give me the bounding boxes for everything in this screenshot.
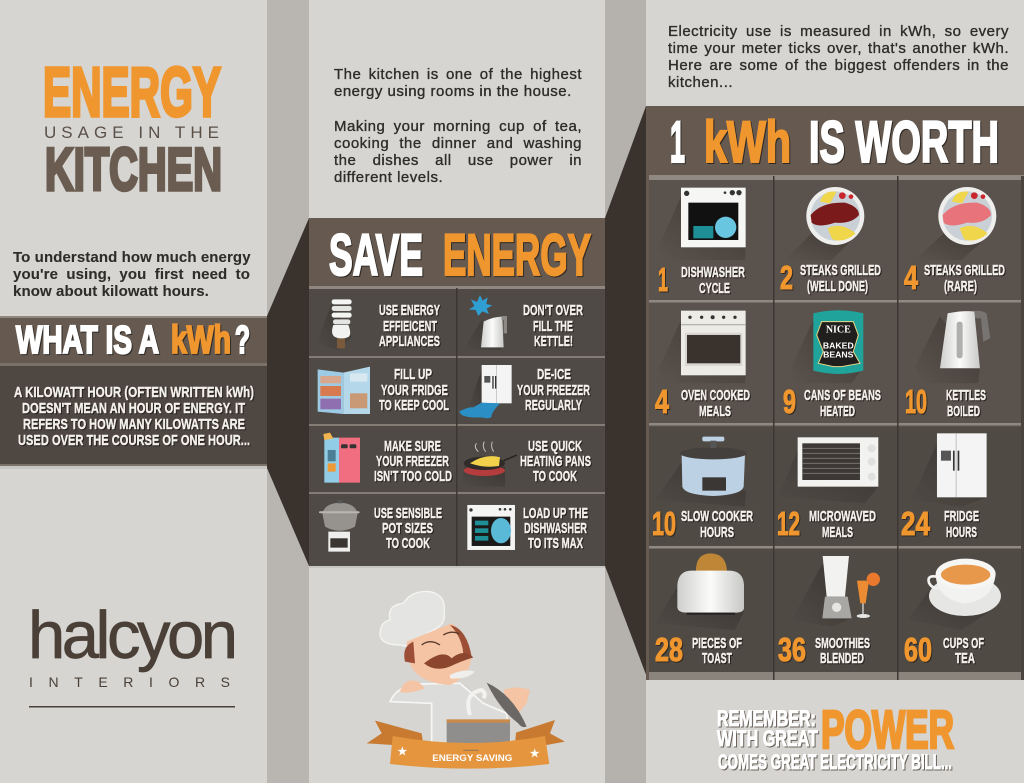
text: load up dishwasher: LOAD UP THE [523,505,588,522]
spoon [450,671,475,679]
fold: left [267,218,309,566]
logo: halcyon interiors: INTERIORS [29,674,230,690]
icon: baked beans: NICE [826,325,851,336]
text: quick heating pans: TO COOK [533,468,577,485]
cell: steaks well done: STEAKS GRILLED [800,262,881,279]
cell: oven cooked meals: MEALS [699,403,731,420]
text: don't over fill: FILL THE [533,318,573,335]
text: quick heating pans [520,438,591,485]
text: sensible pot sizes: TO COOK [386,535,430,552]
cell: fridge hours: HOURS [946,524,977,541]
heading: what is a kWh: WHAT IS A [16,319,159,362]
heading: what is a kWh: kWh [171,319,231,362]
text: don't over fill [523,302,583,350]
icon: toaster [655,553,744,630]
text: fill up fridge: TO KEEP COOL [379,397,449,414]
heading: 1 kWh is worth: 1 [670,110,685,175]
heading: save energy: SAVE [329,223,423,288]
right intro text: Here are some of the biggest offenders in the [668,57,1009,74]
cell: cups of tea: CUPS OF [943,635,984,652]
middle intro text: the dishes all use power in [334,152,582,169]
icon: fridge [912,433,987,507]
cell: fridge hours: FRIDGE [944,508,979,525]
cell: steaks well done: (WELL DONE) [807,278,868,295]
icon: cold freezer [323,433,360,483]
text: de-ice freezer: REGULARLY [525,397,582,414]
text block: kWh definition: A KILOWATT HOUR (OFTEN WRITTEN kWh) [14,384,254,401]
chef hand [400,680,530,713]
icon: steak rare [915,187,996,260]
icon: chef with pot and banner [367,591,565,769]
cell: cans of beans: 9 [783,383,796,420]
icon: bulb [317,299,352,350]
middle intro text: different levels. [334,169,443,186]
cell: dishwasher cycle [658,261,745,298]
heading: what is a kWh: ? [235,319,250,362]
cell: steaks rare: (RARE) [944,278,977,295]
cell: fridge hours [901,505,979,542]
text: de-ice freezer: YOUR FREEZER [517,382,590,399]
right intro text [668,23,1009,91]
icon: microwave [778,437,878,503]
title [43,53,222,203]
text: freezer not too cold [374,438,452,485]
cell: pieces of toast: PIECES OF [692,635,742,652]
text: quick heating pans: HEATING PANS [520,453,591,470]
panel: 1 kWh is worth [646,106,1024,680]
pot lid [487,683,527,727]
footer slogan: POWER [821,700,954,760]
middle intro text: energy using rooms in the house. [334,83,572,100]
middle intro text: The kitchen is one of the highest [334,66,582,83]
heading: 1 kWh is worth: kWh [704,110,791,175]
heading: save energy [329,223,591,288]
cell: slow cooker hours: HOURS [700,524,734,541]
middle intro text: Making your morning cup of tea, [334,118,582,135]
chef moustache [424,653,473,669]
middle intro text [334,66,582,186]
text: load up dishwasher [523,505,588,552]
cell: smoothies blended [778,631,870,668]
text: fill up fridge [379,366,449,414]
text: use energy efficient [379,302,440,350]
text: fill up fridge: YOUR FRIDGE [381,382,448,399]
cell: slow cooker hours [652,505,753,542]
banner: ★ [397,743,408,758]
cell: cans of beans [783,383,881,420]
cell: cans of beans: HEATED [820,403,855,420]
logo: halcyon interiors [28,598,238,708]
icon: steak well done [785,187,864,260]
icon: baked beans: BAKED [823,340,854,350]
cell: kettles boiled: 10 [905,383,927,420]
intro text: know about kilowatt hours. [13,283,209,300]
cell: smoothies blended: 36 [778,631,806,668]
text: freezer not too cold: ISN'T TOO COLD [374,468,452,485]
chef face [407,623,472,685]
pot [447,721,510,743]
heading: save energy: ENERGY [443,223,591,288]
chef hat [380,591,444,647]
cell: slow cooker hours: SLOW COOKER [681,508,753,525]
title: ENERGY [43,53,221,131]
panel: save energy [309,218,605,568]
text: freezer not too cold: MAKE SURE [384,438,441,455]
right intro text: time your meter ticks over, that's another kWh. [668,40,1009,57]
cell: microwaved meals: MEALS [822,524,853,541]
cell: microwaved meals: 12 [777,505,800,542]
icon: baked beans [792,310,863,383]
title: USAGE IN THE [44,123,219,142]
cell: cans of beans: CANS OF BEANS [804,387,881,404]
text: load up dishwasher: TO ITS MAX [528,535,583,552]
text block: kWh definition: REFERS TO HOW MANY KILOWATTS ARE [23,416,245,433]
cell: slow cooker hours: 10 [652,505,676,542]
steam [468,690,485,715]
icon: loaded dishwasher [467,505,515,550]
middle intro text: cooking the dinner and washing [334,135,582,152]
text: sensible pot sizes: POT SIZES [382,520,433,537]
text: freezer not too cold: YOUR FREEZER [376,453,449,470]
text: sensible pot sizes [374,505,442,552]
banner [367,720,565,769]
chef body [390,683,510,743]
banner: ENERGY SAVING [432,753,512,763]
icon: overfilled kettle [463,295,507,350]
cell: microwaved meals: MICROWAVED [809,508,876,525]
cell: dishwasher cycle: CYCLE [699,280,730,297]
text: de-ice freezer: DE-ICE [537,366,571,383]
cell: kettles boiled: KETTLES [946,387,986,404]
text: sensible pot sizes: USE SENSIBLE [374,505,442,522]
text: fill up fridge: FILL UP [394,366,432,383]
heading: 1 kWh is worth [670,110,999,175]
cell: pieces of toast: TOAST [702,650,732,667]
text: don't over fill: KETTLE! [534,333,573,350]
fold: right [605,106,648,680]
cell: dishwasher cycle: DISHWASHER [681,264,745,281]
icon: pot on stove [319,500,360,552]
title: KITCHEN [45,136,222,203]
cell: kettles boiled [905,383,986,420]
cell: smoothies blended: BLENDED [820,650,864,667]
intro text: you're using, you first need to [13,266,250,283]
icon: frying pan [462,442,517,487]
cell: smoothies blended: SMOOTHIES [815,635,870,652]
cell: cups of tea [904,631,984,668]
cell: fridge hours: 24 [901,505,931,542]
intro text: To understand how much energy [13,249,251,266]
text block: kWh definition: DOESN'T MEAN AN HOUR OF ENERGY. IT [22,400,245,417]
cell: dishwasher cycle: 1 [658,261,668,298]
right intro text: kitchen... [668,74,733,91]
icon: open fridge [318,367,370,414]
icon: melting freezer [459,365,512,418]
cell: steaks well done [780,259,881,296]
text: load up dishwasher: DISHWASHER [524,520,587,537]
cell: pieces of toast: 28 [655,631,683,668]
cell: steaks rare [904,259,1005,296]
cell: steaks rare: 4 [904,259,918,296]
cell: cups of tea: 60 [904,631,932,668]
text: quick heating pans: USE QUICK [528,438,582,455]
footer slogan: WITH GREAT [717,726,818,751]
cell: oven cooked meals [655,383,750,420]
icon: blender and smoothie [792,556,880,627]
text block: kWh definition [14,384,254,449]
icon: cup of tea [908,559,1001,630]
icon: kettle [915,311,990,383]
footer slogan [717,700,954,774]
text: use energy efficient: USE ENERGY [379,302,440,319]
text block: kWh definition: USED OVER THE COURSE OF ONE HOUR... [18,432,250,449]
cell: oven cooked meals: 4 [655,383,669,420]
banner: ★ [529,745,540,760]
logo: halcyon interiors: halcyon [28,598,238,673]
footer slogan: REMEMBER: [717,706,816,731]
text: don't over fill: DON'T OVER [523,302,583,319]
cell: cups of tea: TEA [955,650,975,667]
icon: baked beans: BEANS [823,349,854,359]
icon: dishwasher [658,188,746,260]
cell: steaks well done: 2 [780,259,793,296]
text: use energy efficient: APPLIANCES [379,333,440,350]
intro text [13,249,251,300]
icon: slow cooker [655,437,747,507]
cell: microwaved meals [777,505,876,542]
right intro text: Electricity use is measured in kWh, so every [668,23,1009,40]
text: use energy efficient: EFFIEICENT [383,318,437,335]
cell: kettles boiled: BOILED [947,403,980,420]
panel: what is a kWh [0,316,267,469]
icon: oven [658,311,746,383]
cell: oven cooked meals: OVEN COOKED [681,387,750,404]
cell: pieces of toast [655,631,742,668]
text: de-ice freezer [517,366,590,414]
